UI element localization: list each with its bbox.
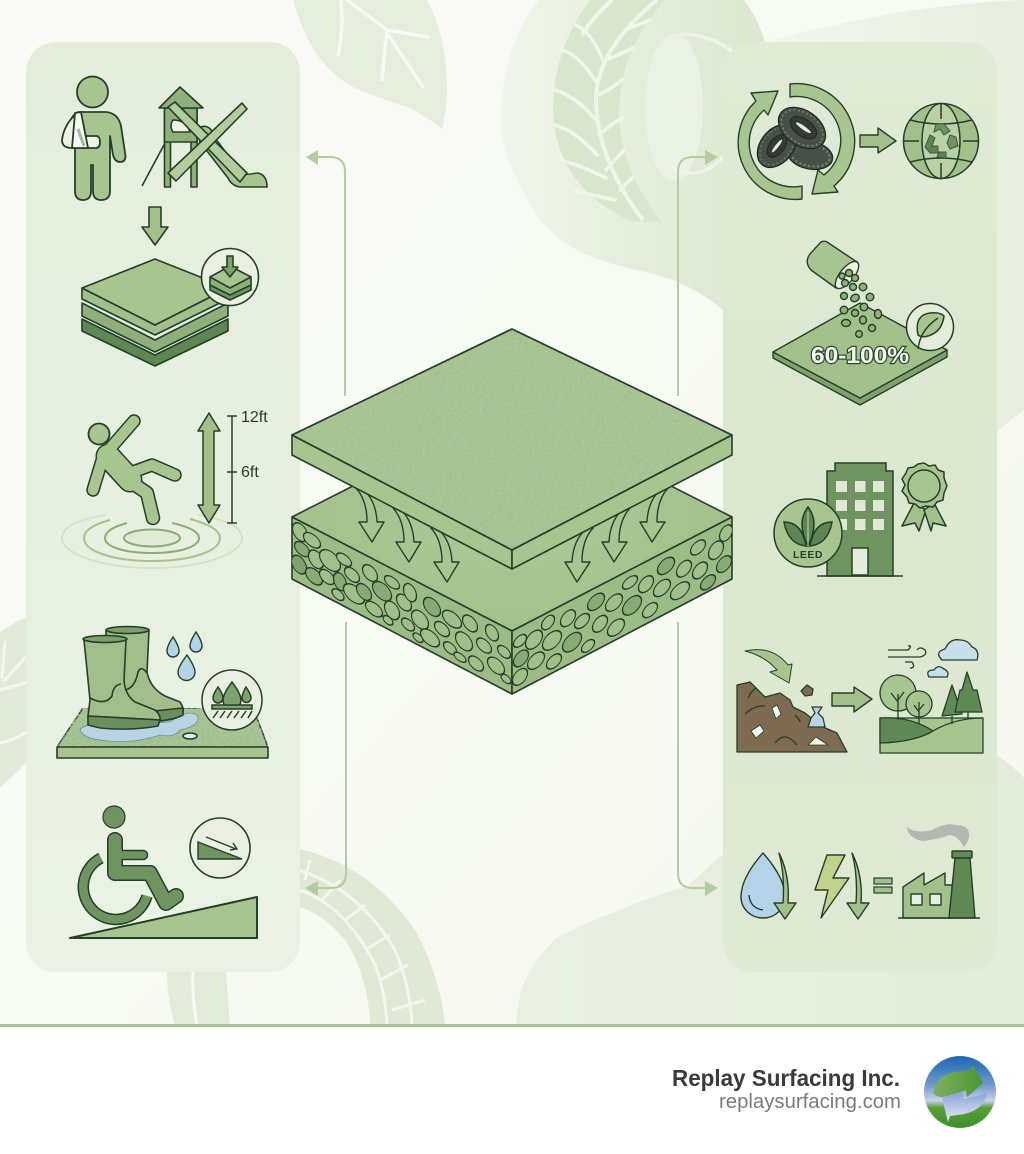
badge: LEED [774,499,842,567]
height scale [227,409,268,523]
icon: water drop with down arrow [741,853,796,919]
icon: layered cushioned surface [82,248,258,366]
icon: falling child [88,421,175,518]
icon: impact ripples [62,515,242,568]
icon: rubber boots on wet permeable surface [57,626,268,758]
recycle symbol [925,124,958,158]
company name: Replay Surfacing Inc. [672,1065,900,1091]
connector: upper right arrow [678,150,718,396]
icon: recycling globe [904,104,978,178]
label: 6ft: 6ft [241,464,259,481]
icon: LEED building [817,463,903,576]
lower aggregate layer [291,486,733,695]
panel: right benefits [723,42,997,972]
icon: double height arrow [198,413,220,523]
company website: replaysurfacing.com [719,1091,901,1113]
panel: left benefits [26,42,300,972]
mat [57,708,268,758]
infiltration arrows [356,488,668,582]
badge: leaf [906,304,954,350]
icon: equals sign [874,878,892,893]
label: 12ft: 12ft [241,409,268,426]
footer [0,1024,1024,1154]
upper surface layer [292,329,732,569]
arrow: down to layers [142,207,168,245]
pebbles left face [292,519,511,689]
badge: permeable drainage [202,670,262,730]
connector: upper left arrow [306,150,345,396]
icon: recycling arrows [738,84,855,199]
icon: clean landscape [880,640,983,753]
connector: lower right arrow [678,622,718,896]
arrow: landfill to nature [832,687,872,712]
pebbles right face [512,521,732,690]
platform [773,303,947,405]
background: leaf left edge [0,617,28,787]
label: 60-100%: 60-100% [811,342,909,368]
central illustration: exploded permeable surface layers [292,329,732,694]
icon: rubber crumbs pouring [773,241,947,405]
background: watermark leaf top [293,0,447,129]
arrow: to globe [860,128,896,153]
bucket [807,241,863,292]
connector: lower left arrow [305,622,346,896]
logo [924,1056,996,1128]
icon: factory with smoke [898,824,980,918]
icon: injured child with sling [62,76,126,200]
badge: impact layers [202,248,258,306]
icon: water drops [167,632,202,680]
icon: stacked tires [749,99,835,175]
icon: lightning bolt with down arrow [815,853,869,919]
icon: crossed-out playground [142,87,267,187]
background: blob bottom right [516,755,1024,1025]
label: LEED: LEED [793,549,823,561]
background: tire bottom [167,849,445,1025]
background: swoosh and tire top right [501,0,1024,432]
icon: wheelchair user on ramp [70,806,257,938]
icon: rosette award [902,463,947,531]
icon: landfill [737,650,847,752]
badge: gentle slope [190,818,250,878]
crumbs [839,270,882,337]
